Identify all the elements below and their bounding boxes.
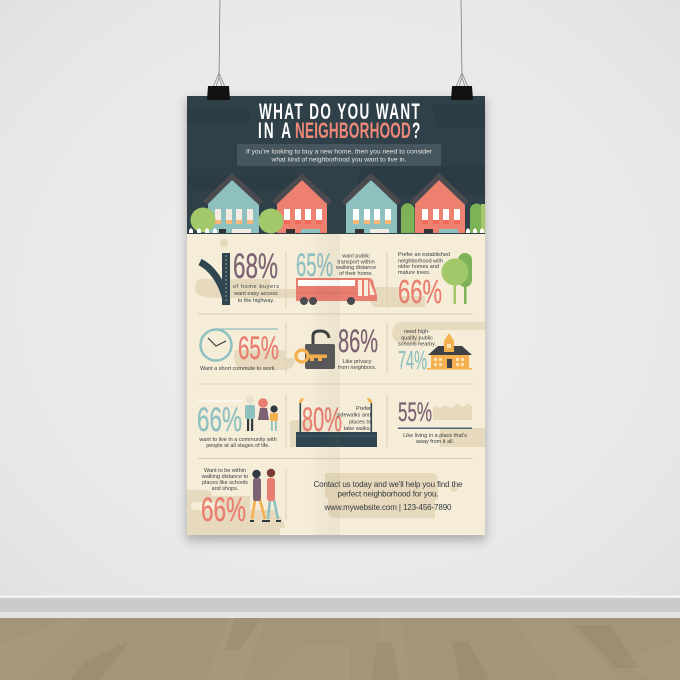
title: ? bbox=[412, 117, 420, 143]
title: WHAT DO YOU WANT bbox=[259, 98, 420, 124]
poster shadow bbox=[186, 100, 486, 541]
cream highlight blob bbox=[191, 502, 221, 510]
stat: walking distance: and shops. bbox=[212, 486, 239, 492]
hanging wires bbox=[219, 0, 462, 76]
stat: public transport: transport within bbox=[337, 260, 375, 266]
house 2 bbox=[272, 173, 332, 233]
stat: sidewalks: take walks. bbox=[344, 426, 371, 432]
stat: all stages of life: want to live in a community with bbox=[198, 437, 277, 443]
stat: highway bbox=[200, 247, 279, 305]
stat: schools: need high- bbox=[404, 329, 430, 335]
stat: away from it all: away from it all. bbox=[416, 439, 455, 445]
stat: mature trees: neighborhood with bbox=[398, 258, 443, 264]
house 3 bbox=[341, 173, 401, 233]
stat: highway: to the highway. bbox=[238, 298, 275, 304]
stat: schools: quality public bbox=[401, 336, 433, 342]
stat: privacy: from neighbors. bbox=[338, 365, 377, 371]
stat: schools bbox=[398, 329, 472, 375]
contact call to action: Contact us today and we'll help you find the bbox=[314, 480, 463, 489]
icon: skyline silhouette bbox=[433, 404, 472, 420]
stat: mature trees: 66% bbox=[398, 273, 442, 310]
stat: mature trees bbox=[398, 252, 472, 310]
stat: all stages of life: people at all stages of life. bbox=[206, 443, 270, 449]
stat: public transport: walking distance bbox=[335, 265, 376, 271]
binder clip left bbox=[207, 73, 230, 100]
title: NEIGHBORHOOD bbox=[295, 117, 411, 143]
contact call to action bbox=[314, 480, 463, 512]
intro text box: what kind of neighborhood you want to live in. bbox=[270, 156, 407, 164]
stat: mature trees: older homes and bbox=[398, 264, 439, 270]
stat: mature trees: mature trees. bbox=[398, 270, 431, 276]
intro text box: If you're looking to buy a new home, then you need to consider bbox=[246, 148, 432, 156]
icon: trees bbox=[442, 253, 472, 304]
stat: walking distance: 66% bbox=[201, 491, 246, 529]
stat: sidewalks: 80% bbox=[302, 401, 342, 439]
icon: school building bbox=[427, 333, 472, 370]
stat: commute: Want a short commute to work. bbox=[200, 366, 276, 372]
stat: sidewalks bbox=[296, 398, 377, 447]
icon: bus bbox=[296, 278, 377, 305]
title: IN A bbox=[258, 117, 291, 143]
stat: public transport bbox=[296, 247, 377, 305]
stat: sidewalks: sidewalks and bbox=[336, 412, 371, 418]
icon: walking couple bbox=[250, 469, 281, 522]
poster fold shading bbox=[310, 233, 340, 535]
stat: mature trees: Prefer an established bbox=[398, 252, 450, 258]
stat: schools: 74% bbox=[398, 345, 427, 375]
cream background clouds bbox=[187, 239, 485, 535]
contact call to action: perfect neighborhood for you. bbox=[338, 490, 438, 498]
trees and fence bbox=[189, 203, 485, 234]
stat: walking distance bbox=[201, 468, 281, 529]
contact call to action: www.mywebsite.com | 123-456-7890 bbox=[324, 503, 452, 512]
header panel bbox=[187, 96, 485, 234]
stat: all stages of life: 66% bbox=[197, 401, 242, 439]
wood floor bbox=[0, 618, 680, 680]
stat: public transport: want public bbox=[341, 254, 370, 260]
stat: privacy: Like privacy bbox=[342, 359, 372, 365]
stat: all stages of life bbox=[197, 396, 278, 449]
house 1 bbox=[203, 173, 263, 233]
stat: public transport: of their home. bbox=[339, 271, 373, 277]
stat: sidewalks: places to bbox=[349, 420, 371, 426]
icon: padlock and key bbox=[296, 331, 335, 369]
stat: privacy: 86% bbox=[338, 323, 378, 359]
stat: sidewalks: Prefer bbox=[356, 406, 371, 412]
icon: road bbox=[200, 253, 230, 305]
stat: schools: schools nearby. bbox=[398, 342, 437, 348]
stat: commute bbox=[200, 329, 279, 372]
stat: away from it all: Like living in a place that's bbox=[403, 433, 467, 439]
stat: walking distance: Want to be within bbox=[204, 468, 246, 474]
binder clip right bbox=[451, 73, 473, 100]
stat: commute: 65% bbox=[238, 330, 279, 366]
house 4 bbox=[410, 173, 469, 233]
stat: walking distance: places like schools bbox=[202, 480, 248, 486]
baseboard bbox=[0, 595, 680, 618]
stat: highway: 68% bbox=[233, 247, 278, 286]
icon: clock bbox=[200, 329, 278, 360]
stat: away from it all: 55% bbox=[398, 397, 432, 427]
stat: privacy bbox=[296, 323, 378, 371]
divider lines bbox=[198, 252, 473, 520]
poster bbox=[187, 96, 485, 535]
intro text box bbox=[237, 144, 441, 166]
icon: park with lamps bbox=[296, 398, 377, 447]
title bbox=[258, 98, 420, 143]
stat: walking distance: walking distance to bbox=[201, 474, 248, 480]
stat: highway: want easy access bbox=[233, 291, 278, 297]
stat: public transport: 65% bbox=[296, 247, 333, 283]
stat: highway: of home buyers bbox=[233, 284, 279, 290]
icon: family bbox=[245, 396, 278, 431]
stat: away from it all bbox=[398, 397, 472, 445]
